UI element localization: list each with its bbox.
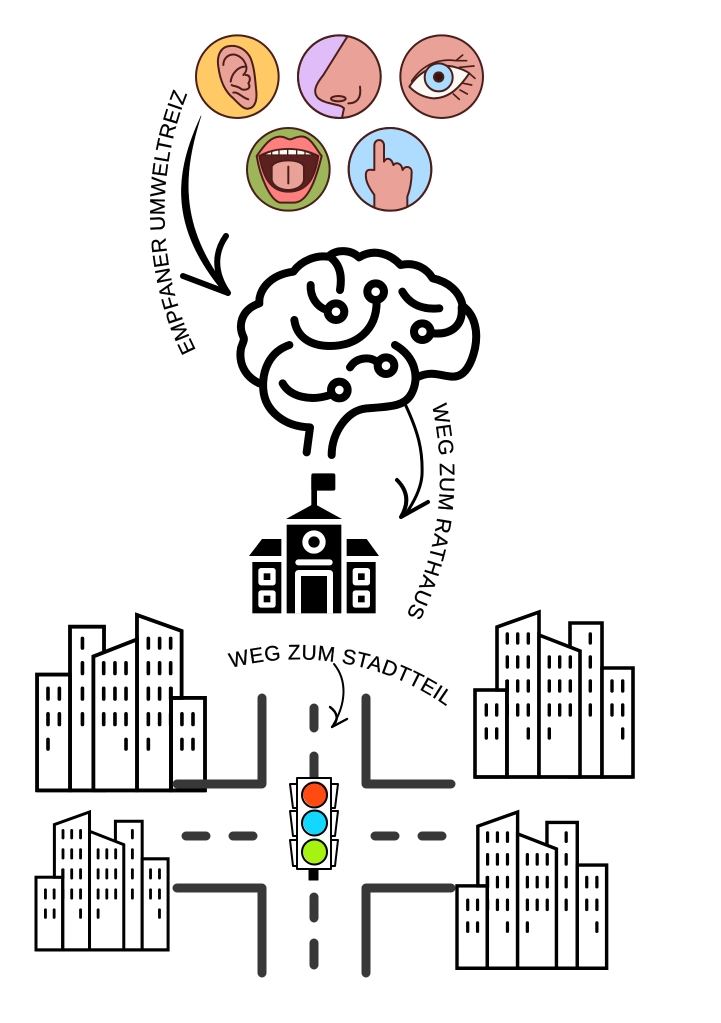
city block: top right bbox=[475, 612, 633, 777]
road crossing bbox=[177, 698, 451, 973]
label: Empfaner Umweltreiz: EMPFANER UMWELTREIZ bbox=[150, 90, 196, 355]
arrow: senses to brain bbox=[181, 116, 230, 295]
city block: top left bbox=[37, 615, 205, 790]
city block: bottom left bbox=[36, 812, 168, 950]
brain bbox=[240, 251, 476, 455]
icon: mouth bbox=[247, 128, 330, 211]
arrow: to district bbox=[330, 664, 347, 727]
arrow: brain to town hall bbox=[397, 406, 428, 517]
icon: ear bbox=[196, 35, 279, 118]
icon: traffic light bbox=[290, 778, 338, 880]
icon: town hall bbox=[249, 473, 379, 613]
label: Weg zum Rathaus: WEG ZUM RATHAUS bbox=[408, 402, 455, 619]
icons: five senses bbox=[196, 35, 483, 212]
icon: hand bbox=[349, 128, 431, 212]
label: Weg zum Stadtteil: WEG ZUM STADTTEIL bbox=[228, 644, 448, 706]
icon: nose bbox=[297, 34, 382, 119]
city block: bottom right bbox=[457, 812, 607, 968]
icon: eye bbox=[400, 35, 483, 118]
